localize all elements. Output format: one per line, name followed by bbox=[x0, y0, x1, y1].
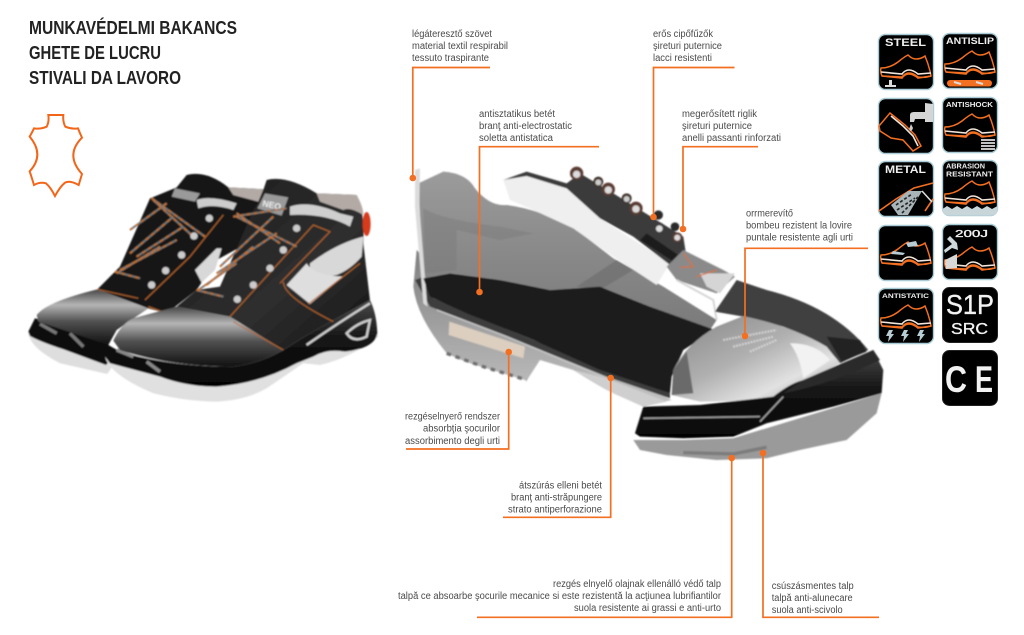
white padding bbox=[503, 175, 670, 285]
badge: antishock bbox=[942, 98, 998, 152]
badge: metal: METAL bbox=[885, 164, 926, 176]
callout: non-slip sole: suola anti-scivolo bbox=[772, 605, 843, 616]
callout: breathable fabric: material textil respirabil bbox=[412, 41, 508, 52]
heel and midsole bbox=[413, 250, 672, 407]
callout: strong laces: lacci resistenti bbox=[653, 53, 712, 64]
badge: antishock: ANTISHOCK bbox=[946, 100, 994, 109]
badge: antistatic bbox=[878, 288, 934, 344]
callout: non-slip sole: csúszásmentes talp bbox=[772, 581, 854, 592]
title bbox=[29, 17, 237, 88]
badge: antistatic: ANTISTATIC bbox=[882, 293, 929, 300]
title: GHETE DE LUCRU bbox=[29, 43, 161, 63]
callout: antistatic insole: antisztatikus betét bbox=[479, 109, 555, 120]
photo: pair of work boots bbox=[28, 174, 378, 402]
callout: breathable fabric bbox=[410, 29, 508, 181]
callout: puncture-resistant insert: átszúrás elleni betét bbox=[519, 480, 602, 492]
callout: strong laces: şireturi puternice bbox=[653, 41, 722, 52]
callout: strong laces: erős cipőfűzők bbox=[653, 29, 714, 40]
callout: shock absorption: absorbţia şocurilor bbox=[423, 424, 501, 435]
right boot bbox=[105, 179, 378, 402]
badge: S1P SRC: SRC bbox=[951, 321, 988, 338]
callout: reinforced eyelets: megerősített riglik bbox=[682, 109, 758, 120]
eyelets bbox=[570, 167, 682, 242]
callout: toe cap: puntale resistente agli urti bbox=[746, 233, 853, 244]
toe outsole bbox=[633, 393, 882, 460]
shock absorber insert bbox=[449, 322, 525, 358]
badge: steel bbox=[878, 34, 934, 90]
callout: toe cap: bombeu rezistent la lovire bbox=[746, 221, 852, 232]
badge: abrasion resistant bbox=[942, 160, 998, 216]
badge: S1P SRC bbox=[942, 288, 998, 342]
callout: puncture-resistant insert: branţ anti-străpungere bbox=[511, 493, 602, 504]
cut-away boot diagram bbox=[413, 167, 883, 460]
insole bbox=[423, 273, 715, 393]
callout: puncture-resistant insert: strato antiperforazione bbox=[508, 505, 602, 516]
steel toe cap bbox=[672, 316, 840, 402]
toe bumper bbox=[635, 350, 883, 438]
callout: strong laces bbox=[650, 29, 734, 220]
callout: oil-resistant sole: rezgés elnyelő olajnak ellenálló védő talp bbox=[553, 579, 721, 590]
callout: breathable fabric: tessuto traspirante bbox=[412, 53, 489, 64]
badge: metal bbox=[878, 162, 934, 216]
callout: shock absorption bbox=[405, 349, 512, 449]
badge: CE mark: E bbox=[975, 359, 993, 400]
callout: shock absorption: assorbimento degli urti bbox=[405, 436, 500, 447]
callout: toe cap bbox=[742, 208, 868, 339]
badge: abrasion resistant: ABRASION bbox=[946, 164, 985, 170]
callout: oil-resistant sole bbox=[398, 455, 735, 617]
badge: antislip: ANTISLIP bbox=[946, 36, 994, 46]
badge: 200J impact: 200J bbox=[955, 228, 988, 240]
callout: antistatic insole: soletta antistatica bbox=[479, 133, 553, 144]
callout: oil-resistant sole: suola resistente ai grassi e anti-urto bbox=[574, 603, 721, 614]
badge: antislip bbox=[942, 34, 998, 88]
badge: shoe with vented upper bbox=[878, 226, 934, 280]
callout: antistatic insole: branţ anti-electrostatic bbox=[479, 121, 572, 132]
callout: shock absorption: rezgéselnyerő rendszer bbox=[405, 412, 501, 422]
badge: CE mark bbox=[942, 350, 998, 406]
callout: puncture-resistant insert bbox=[503, 375, 614, 517]
callout: toe cap: orrmerevítő bbox=[746, 208, 793, 220]
icon: leather hide bbox=[30, 115, 82, 196]
lacing strip bbox=[503, 172, 687, 265]
callout: breathable fabric: légáteresztő szövet bbox=[412, 29, 492, 40]
badge: oil resistance bbox=[878, 98, 934, 154]
badge: CE mark: C bbox=[945, 359, 967, 400]
title: STIVALI DA LAVORO bbox=[29, 68, 181, 88]
left boot bbox=[28, 174, 265, 374]
callout: oil-resistant sole: talpă ce absoarbe şocurile mecanice si este rezistentă la acţiunea lubrifiantilor bbox=[398, 591, 722, 602]
badge: 200J impact bbox=[942, 224, 998, 280]
callout: reinforced eyelets: anelli passanti rinforzati bbox=[682, 133, 781, 144]
badge: abrasion resistant: RESISTANT bbox=[946, 172, 994, 178]
mesh lining bbox=[418, 172, 717, 330]
badge: steel: STEEL bbox=[885, 37, 926, 49]
callout: antistatic insole bbox=[476, 109, 599, 295]
callout: non-slip sole: talpă anti-alunecare bbox=[772, 593, 853, 604]
toe upper bbox=[715, 280, 868, 363]
callout: reinforced eyelets bbox=[680, 109, 781, 232]
callout: reinforced eyelets: şireturi puternice bbox=[682, 121, 752, 132]
right boot: NEO bbox=[262, 198, 282, 212]
title: MUNKAVÉDELMI BAKANCS bbox=[29, 17, 237, 38]
callout: non-slip sole bbox=[760, 450, 879, 617]
badge: S1P SRC: S1P bbox=[946, 289, 994, 320]
